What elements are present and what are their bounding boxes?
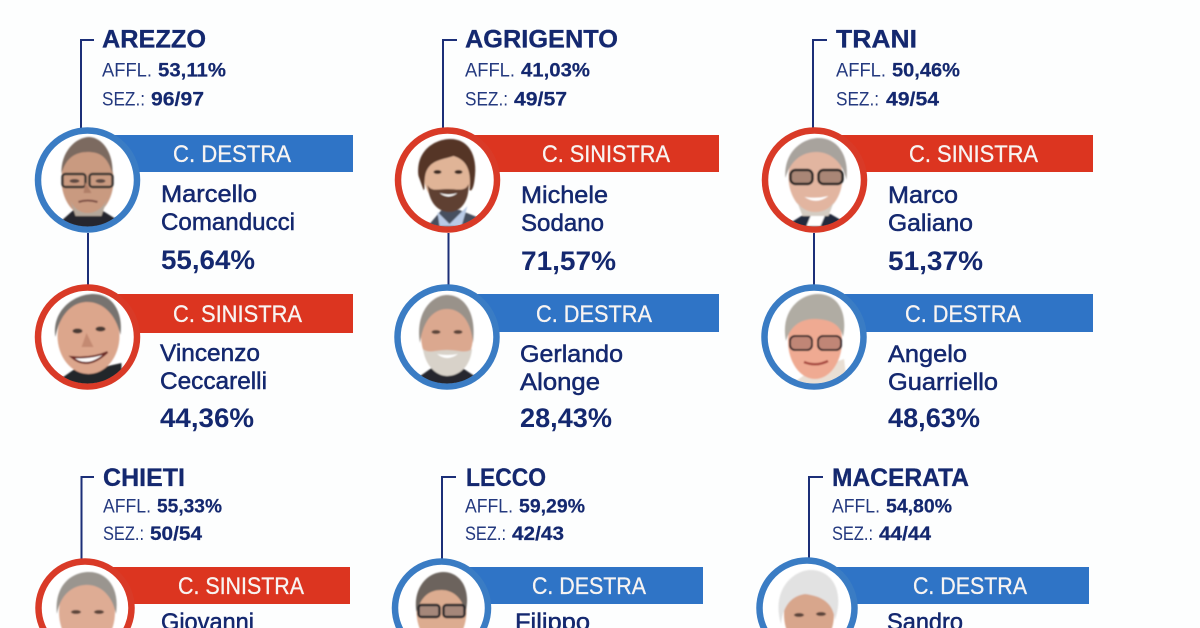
heading: Trani: TRANI <box>836 26 917 54</box>
party label: C. Destra: C. DESTRA <box>173 141 291 168</box>
party bar: C. Sinistra <box>826 135 1093 172</box>
turnout: Macerata <box>832 496 952 518</box>
party label: C. Destra: C. DESTRA <box>913 573 1027 600</box>
heading: Chieti: CHIETI <box>103 464 185 492</box>
vote share: Michele Sodano: 71,57% <box>521 246 616 276</box>
party bar: C. Sinistra <box>100 567 350 604</box>
vote share: Vincenzo Ceccarelli: 44,36% <box>160 403 254 433</box>
sections: Agrigento: 49/57 <box>514 90 567 110</box>
connector bracket: Macerata <box>809 477 823 559</box>
panel: Trani <box>764 26 1093 433</box>
sections: Agrigento <box>465 90 567 110</box>
panel: Agrigento <box>398 26 719 433</box>
connector bracket: Lecco <box>442 477 456 559</box>
candidate name: Vincenzo Ceccarelli: Vincenzo <box>160 340 260 367</box>
candidate name: Angelo Guarriello: Angelo <box>888 341 967 368</box>
sections: Agrigento: SEZ.: <box>465 90 508 110</box>
panel: Chieti <box>38 464 350 628</box>
connector bracket: Arezzo <box>81 40 94 285</box>
party bar: C. Destra <box>100 135 353 172</box>
candidate name: Gerlando Alonge <box>520 341 623 396</box>
party bar: C. Sinistra <box>460 135 719 172</box>
party label: C. Destra: C. DESTRA <box>905 301 1021 328</box>
sections: Arezzo <box>102 90 204 110</box>
turnout: Macerata: AFFL. <box>832 496 880 518</box>
sections: Chieti: SEZ.: <box>103 524 144 545</box>
sections: Lecco: SEZ.: <box>465 524 506 545</box>
connector bracket: Trani <box>813 40 827 285</box>
candidate name: Marcello Comanducci: Comanducci <box>161 209 295 236</box>
vote share: Angelo Guarriello: 48,63% <box>888 403 980 433</box>
portrait: Marco Galiano <box>765 130 864 235</box>
sections: Arezzo: 96/97 <box>151 90 204 110</box>
connector bracket: Chieti <box>82 477 94 559</box>
vote share: Gerlando Alonge: 28,43% <box>520 403 612 433</box>
turnout: Arezzo <box>102 60 226 82</box>
sections: Lecco <box>465 524 564 545</box>
turnout: Arezzo: 53,11% <box>158 60 226 82</box>
turnout: Lecco <box>465 496 585 518</box>
turnout: Lecco: AFFL. <box>465 496 513 518</box>
candidate name: Vincenzo Ceccarelli: Ceccarelli <box>160 368 267 395</box>
party bar: C. Destra <box>460 294 719 332</box>
turnout: Chieti: AFFL. <box>103 496 151 518</box>
panel: Arezzo <box>38 26 353 433</box>
heading: Lecco: LECCO <box>466 464 546 492</box>
portrait: Filippo <box>395 562 488 628</box>
candidate name: Gerlando Alonge: Gerlando <box>520 341 623 368</box>
turnout: Agrigento <box>465 60 590 82</box>
turnout: Chieti <box>103 496 222 518</box>
turnout: Trani: AFFL. <box>836 60 886 82</box>
sections: Macerata <box>832 524 931 545</box>
panel: Lecco <box>395 464 703 628</box>
sections: Trani: 49/54 <box>886 90 939 110</box>
party bar: C. Destra <box>826 294 1093 332</box>
candidate name: Marcello Comanducci: Marcello <box>161 181 257 208</box>
sections: Trani <box>836 90 939 110</box>
party label: C. Sinistra: C. SINISTRA <box>173 301 302 328</box>
party bar: C. Sinistra <box>100 294 353 333</box>
candidate name: Marco Galiano: Galiano <box>888 210 973 237</box>
candidate name: Vincenzo Ceccarelli <box>160 340 267 395</box>
vote share: Marcello Comanducci: 55,64% <box>161 245 255 275</box>
party label: C. Sinistra: C. SINISTRA <box>542 141 670 168</box>
party label: C. Sinistra: C. SINISTRA <box>178 573 304 600</box>
turnout: Macerata: 54,80% <box>886 496 952 518</box>
sections: Arezzo: SEZ.: <box>102 90 145 110</box>
heading: Arezzo: AREZZO <box>102 26 206 54</box>
turnout: Arezzo: AFFL. <box>102 60 152 82</box>
vote share: Marco Galiano: 51,37% <box>888 246 983 276</box>
sections: Macerata: 44/44 <box>879 524 931 545</box>
sections: Chieti: 50/54 <box>150 524 202 545</box>
heading: Macerata: MACERATA <box>832 464 969 492</box>
candidate name: Marcello Comanducci <box>161 181 295 236</box>
panel: Macerata <box>760 464 1089 628</box>
sections: Chieti <box>103 524 202 545</box>
party bar: C. Destra <box>820 567 1089 604</box>
portrait: Vincenzo Ceccarelli <box>38 288 137 392</box>
sections: Lecco: 42/43 <box>512 524 564 545</box>
sections: Macerata: SEZ.: <box>832 524 873 545</box>
candidate name: Angelo Guarriello: Guarriello <box>888 369 998 396</box>
turnout: Lecco: 59,29% <box>519 496 585 518</box>
portrait: Sandro <box>760 560 854 628</box>
turnout: Trani <box>836 60 960 82</box>
party label: C. Destra: C. DESTRA <box>536 301 652 328</box>
party label: C. Destra: C. DESTRA <box>532 573 646 600</box>
turnout: Trani: 50,46% <box>892 60 960 82</box>
candidate name: Marco Galiano <box>888 182 973 237</box>
candidate name: Michele Sodano: Sodano <box>521 210 604 237</box>
portrait: Giovanni <box>38 562 132 628</box>
portrait: Michele Sodano <box>398 130 497 235</box>
party bar: C. Destra <box>455 567 703 604</box>
turnout: Agrigento: AFFL. <box>465 60 515 82</box>
portrait: Angelo Guarriello <box>764 288 864 392</box>
candidate name: Gerlando Alonge: Alonge <box>520 369 600 396</box>
connector bracket: Agrigento <box>443 40 457 285</box>
turnout: Agrigento: 41,03% <box>521 60 590 82</box>
candidate name: Michele Sodano: Michele <box>521 182 608 209</box>
turnout: Chieti: 55,33% <box>157 496 222 518</box>
candidate name: Michele Sodano <box>521 182 608 237</box>
portrait: Marcello Comanducci <box>38 130 137 235</box>
portrait: Gerlando Alonge <box>398 288 496 392</box>
candidate name: Marco Galiano: Marco <box>888 182 958 209</box>
sections: Trani: SEZ.: <box>836 90 879 110</box>
party label: C. Sinistra: C. SINISTRA <box>909 141 1038 168</box>
heading: Agrigento: AGRIGENTO <box>465 26 618 54</box>
candidate name: Angelo Guarriello <box>888 341 998 396</box>
